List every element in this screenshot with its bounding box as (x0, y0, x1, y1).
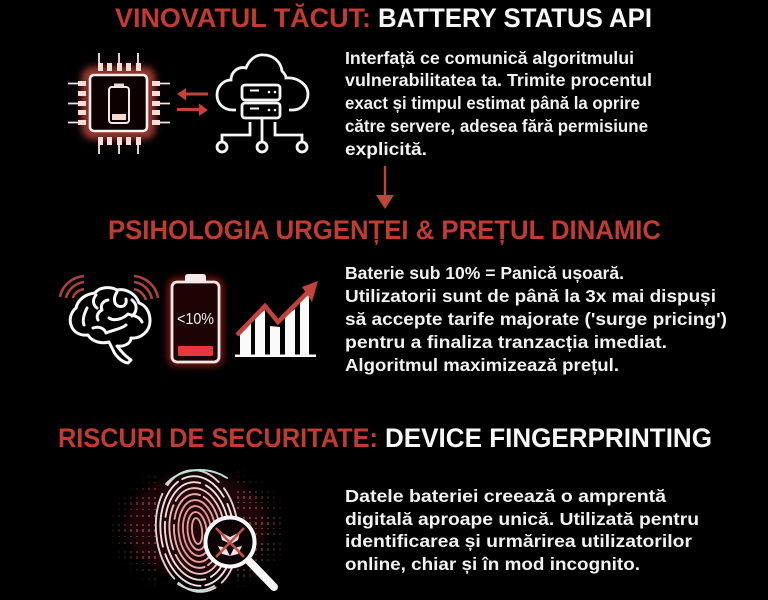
text block: urgency description: Baterie sub 10% = Panică ușoară. (345, 263, 624, 283)
text block: fingerprinting description: identificarea și urmărirea utilizatorilor (345, 531, 692, 551)
icon: low battery: <10% (177, 311, 214, 328)
icon: fingerprint with magnifier (113, 466, 280, 596)
icon: rising price chart (235, 281, 318, 357)
text block: urgency description: să accepte tarife majorate ('surge pricing') (345, 309, 727, 329)
text block: urgency description: Utilizatorii sunt de până la 3x mai dispuși (345, 286, 716, 306)
text block: battery API description: explicită. (345, 139, 427, 159)
heading: security risks: RISCURI DE SECURITATE: (58, 423, 378, 453)
text block: fingerprinting description (345, 486, 699, 574)
heading: silent culprit: BATTERY STATUS API (378, 3, 652, 33)
heading: silent culprit: VINOVATUL TĂCUT: (115, 3, 371, 33)
text block: battery API description: vulnerabilitatea ta. Trimite procentul (345, 70, 652, 90)
heading: urgency psychology: PSIHOLOGIA URGENȚEI & PREȚUL DINAMIC (108, 215, 661, 245)
text block: fingerprinting description: online, chiar și în mod incognito. (345, 554, 640, 574)
icon: low battery (168, 274, 223, 366)
text block: urgency description: pentru a finaliza tranzacția imediat. (345, 332, 667, 352)
heading: silent culprit (115, 3, 652, 33)
icon: cloud server network (217, 55, 308, 152)
arrow: down to next section (376, 166, 394, 209)
text block: battery API description: exact și timpul estimat până la oprire (345, 93, 640, 113)
magnifier (206, 518, 274, 587)
heading: security risks (58, 423, 712, 453)
heading: security risks: DEVICE FINGERPRINTING (385, 423, 712, 453)
text block: battery API description: Interfață ce comunică algoritmului (345, 48, 634, 68)
text block: battery API description (345, 48, 652, 159)
text block: urgency description (345, 263, 727, 375)
icon: brain with signal waves (60, 276, 158, 363)
arrows: exchange between chip and cloud (177, 88, 208, 116)
text block: fingerprinting description: digitală aproape unică. Utilizată pentru (345, 509, 699, 529)
text block: battery API description: către servere, adesea fără permisiune (345, 116, 648, 136)
text block: urgency description: Algoritmul maximizează prețul. (345, 355, 619, 375)
icon: chip with battery (68, 53, 170, 154)
text block: fingerprinting description: Datele bateriei creează o amprentă (345, 486, 666, 506)
